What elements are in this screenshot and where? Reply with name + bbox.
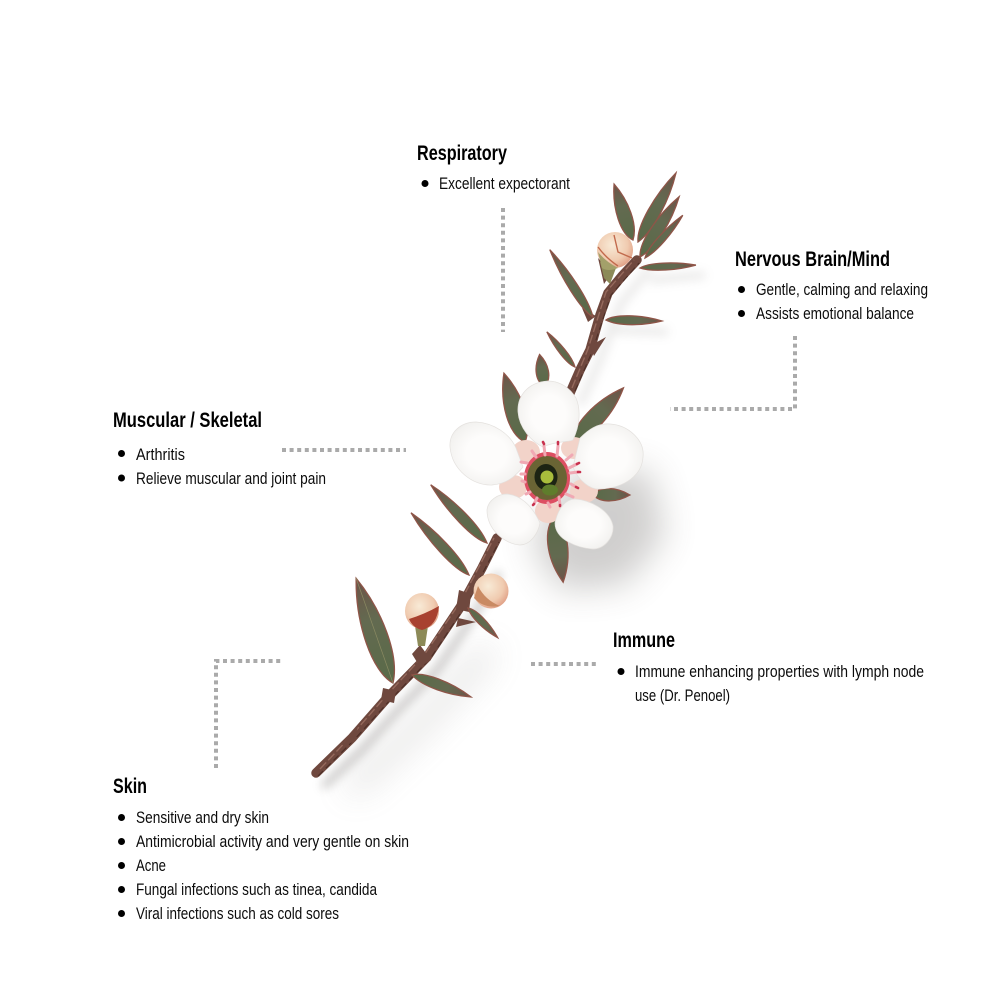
connector: respiratory [501,208,505,332]
heading: skin: Skin [113,775,147,798]
sepals [499,437,598,523]
list: skin: Viral infections such as cold sores [136,904,339,923]
leaves: upper sprig [533,170,696,387]
panel: immune [613,629,924,705]
leaves: around flower [494,370,630,584]
flower [450,381,643,549]
list: nervous: Gentle, calming and relaxing [756,280,928,299]
list: immune: use (Dr. Penoel) [635,686,730,705]
list: skin [118,808,409,923]
list: skin: Antimicrobial activity and very gentle on skin [136,832,409,851]
list: nervous [738,280,928,323]
heading: immune: Immune [613,629,675,652]
connector: immune [531,662,597,666]
list: muscular skeletal [118,445,326,488]
list: skin: Sensitive and dry skin [136,808,269,827]
panel: muscular skeletal [113,409,326,488]
plant shadow [325,268,705,790]
list: immune [618,662,924,705]
list: skin: Acne [136,856,166,875]
list: skin: Fungal infections such as tinea, candida [136,880,377,899]
heading: muscular skeletal: Muscular / Skeletal [113,409,262,432]
panel: skin [113,775,409,923]
heading: nervous: Nervous Brain/Mind [735,248,890,271]
flower buds [405,232,633,646]
petals [450,381,643,549]
panel: respiratory [417,142,570,193]
list: muscular skeletal: Relieve muscular and joint pain [136,469,326,488]
connector: skin [216,661,281,768]
list: muscular skeletal: Arthritis [136,445,185,464]
connector: nervous [670,336,795,409]
leaves: lower sprig [345,481,500,702]
stamens [521,446,578,507]
list: nervous: Assists emotional balance [756,304,914,323]
list: respiratory: Excellent expectorant [439,174,570,193]
illustration: branch with flower [316,170,696,776]
flower centre [521,442,580,507]
connector: muscular [282,448,406,452]
heading: respiratory: Respiratory [417,142,507,165]
stem [316,258,639,776]
panel: nervous [735,248,928,323]
list: immune: Immune enhancing properties with lymph node [635,662,924,681]
